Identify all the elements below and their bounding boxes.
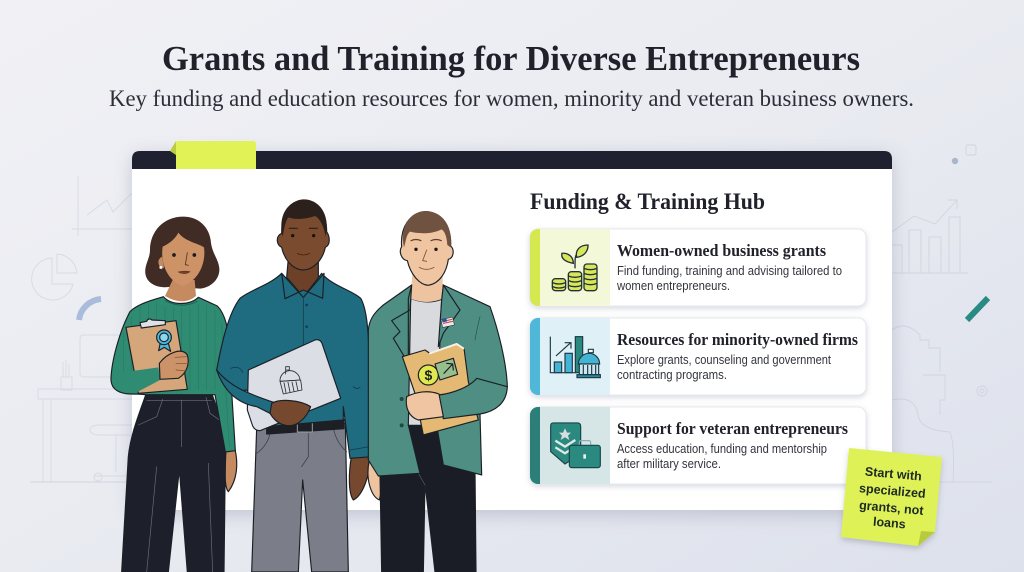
card description: after military service. — [617, 456, 721, 471]
lapels — [392, 285, 460, 363]
icon: growth chart — [435, 358, 458, 380]
card description: women entrepreneurs. — [616, 278, 730, 293]
forearm — [123, 367, 160, 392]
card description: Access education, funding and mentorship — [617, 441, 827, 456]
flag pin — [441, 317, 454, 327]
note text: loans — [872, 515, 906, 531]
panel: main window — [132, 141, 892, 515]
heading: hub: Funding & Training Hub — [530, 189, 765, 214]
note text: specialized — [859, 481, 926, 501]
note text: grants, not — [859, 498, 925, 518]
hair — [145, 217, 219, 289]
face — [162, 232, 204, 280]
icon: capitol on tablet — [280, 367, 302, 394]
card heading: Resources for minority-owned firms — [617, 330, 858, 349]
card description: Find funding, training and advising tailored to — [617, 263, 842, 278]
icon: small dot — [952, 158, 958, 164]
forearm — [217, 370, 277, 413]
hand — [270, 400, 311, 426]
hair — [281, 199, 327, 237]
icon: dollar coin: $ — [424, 367, 432, 383]
icon: plant and coins — [552, 245, 597, 291]
head — [276, 216, 330, 271]
shirt — [217, 273, 373, 458]
card description — [616, 263, 842, 293]
icon: badge and briefcase — [551, 423, 600, 468]
card heading: Support for veteran entrepreneurs — [617, 419, 848, 438]
neck — [286, 262, 319, 292]
card description: contracting programs. — [617, 367, 727, 382]
person: man with tablet — [217, 199, 373, 572]
yellow tape tab — [170, 141, 256, 169]
sticky note — [841, 448, 942, 546]
note text — [859, 465, 926, 531]
head — [400, 212, 453, 285]
icon: chart and capitol — [550, 337, 600, 378]
folder — [402, 344, 478, 435]
tablet — [247, 340, 341, 431]
icon: dollar coin — [418, 365, 438, 385]
neck — [411, 274, 443, 302]
icon: blue arc accent — [79, 299, 101, 320]
sweater — [111, 297, 235, 452]
card: minority-owned firms — [530, 318, 866, 395]
hair — [403, 211, 451, 247]
card heading: Women-owned business grants — [617, 241, 826, 260]
card description: Explore grants, counseling and government — [617, 352, 831, 367]
background line art: right charts and skyline — [30, 145, 992, 482]
note text: Start with — [864, 465, 922, 483]
illustration: three entrepreneurs — [111, 199, 507, 572]
card description — [617, 441, 827, 471]
belt — [267, 419, 344, 434]
trousers — [380, 423, 476, 572]
window title bar — [132, 151, 892, 169]
neck — [165, 280, 196, 301]
jacket buttons — [400, 397, 404, 427]
t-shirt — [408, 298, 442, 425]
card: women-owned business grants — [530, 229, 866, 306]
clipboard — [126, 321, 187, 393]
subtitle: Key funding and education resources for women, minority and veteran business owners. — [109, 86, 914, 112]
trousers — [122, 393, 225, 572]
card description — [617, 352, 831, 382]
title: Grants and Training for Diverse Entrepreneurs — [162, 39, 860, 78]
hand — [349, 455, 370, 500]
hand — [368, 460, 381, 500]
shirt buttons — [305, 304, 308, 328]
hand — [159, 351, 188, 379]
card: veteran entrepreneurs — [530, 407, 866, 484]
right hand — [225, 449, 237, 492]
person: woman with clipboard — [111, 217, 237, 572]
trousers — [252, 423, 348, 572]
rosette — [157, 330, 171, 351]
hand — [406, 392, 443, 420]
person: man with folder — [368, 211, 507, 572]
background line art: left office scene — [32, 176, 140, 482]
sleeve — [438, 378, 507, 419]
icon: teal stroke accent — [967, 298, 988, 320]
jacket — [368, 285, 507, 476]
